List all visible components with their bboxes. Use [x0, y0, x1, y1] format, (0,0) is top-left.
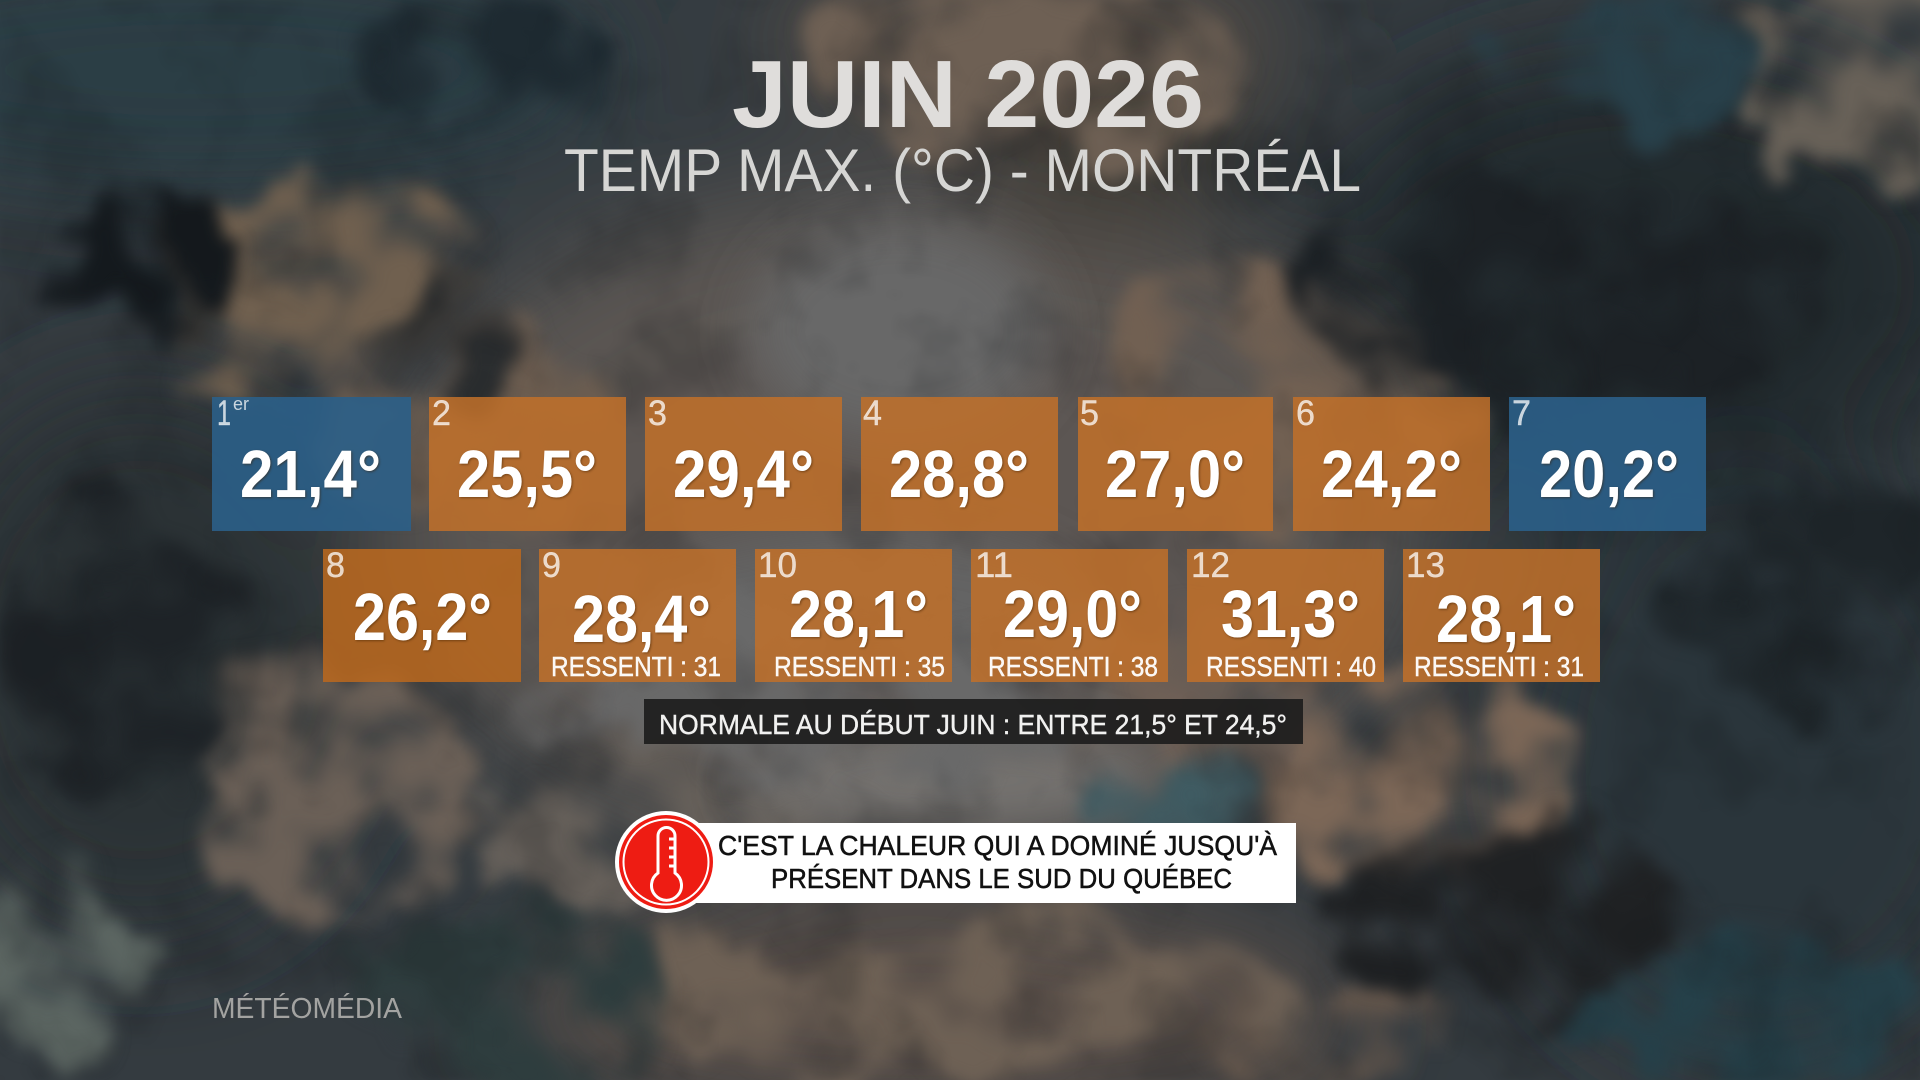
- tile: day 13: 28,1°: [1436, 582, 1576, 657]
- tile: day 12: [1187, 546, 1384, 682]
- subtitle: TEMP MAX. (°C) - MONTRÉAL: [564, 137, 1361, 204]
- tile: day 4: [861, 394, 1058, 531]
- callout banner: PRÉSENT DANS LE SUD DU QUÉBEC: [771, 863, 1232, 894]
- tile: day 13: 13: [1406, 546, 1445, 585]
- tile: day 4: 28,8°: [889, 437, 1029, 512]
- tile: day 5: 5: [1080, 394, 1099, 433]
- tile: day 4: 4: [863, 394, 882, 433]
- tile: day 7: 7: [1512, 394, 1531, 433]
- tile: day 1: [212, 394, 411, 531]
- tile: day 9: [539, 546, 736, 682]
- icon: thermometer badge: [615, 811, 717, 913]
- callout banner: [690, 823, 1296, 903]
- tile: day 11: RESSENTI : 38: [988, 651, 1158, 682]
- tile: day 12: 31,3°: [1221, 577, 1360, 652]
- tile: day 1: 1: [217, 394, 231, 433]
- tile: day 3: 3: [648, 394, 667, 433]
- tile: day 7: [1509, 394, 1706, 531]
- tile: day 11: 29,0°: [1003, 577, 1142, 652]
- tile: day 6: [1293, 394, 1490, 531]
- row 2 tiles: [323, 546, 1600, 682]
- central grey clearing: [640, 220, 1160, 830]
- tile: day 11: 11: [975, 546, 1013, 585]
- tile: day 10: RESSENTI : 35: [774, 651, 945, 682]
- tile: day 12: RESSENTI : 40: [1206, 651, 1376, 682]
- tile: day 5: 27,0°: [1105, 437, 1245, 512]
- tile: day 2: 2: [432, 394, 451, 433]
- row 1 tiles: [212, 394, 1706, 531]
- title: JUIN 2026: [732, 41, 1204, 148]
- tile: day 9: RESSENTI : 31: [551, 651, 721, 682]
- tile: day 10: [755, 546, 952, 682]
- tile: day 9: 28,4°: [572, 582, 711, 657]
- normal temperature bar: [644, 699, 1303, 744]
- tile: day 12: 12: [1191, 546, 1230, 585]
- tile: day 9: 9: [542, 546, 561, 585]
- tile: day 13: RESSENTI : 31: [1414, 651, 1584, 682]
- logo: MétéoMédia: MÉTÉOMÉDIA: [212, 992, 403, 1025]
- callout banner: C'EST LA CHALEUR QUI A DOMINÉ JUSQU'À: [718, 830, 1277, 861]
- tile: day 8: 8: [326, 546, 345, 585]
- tile: day 2: [429, 394, 626, 531]
- tile: day 8: 26,2°: [353, 580, 492, 655]
- normal temperature bar: NORMALE AU DÉBUT JUIN : ENTRE 21,5° ET 24,5°: [659, 709, 1287, 740]
- tile: day 6: 6: [1296, 394, 1315, 433]
- tile: day 3: 29,4°: [673, 437, 814, 512]
- tile: day 1: 21,4°: [240, 437, 381, 512]
- tile: day 8: [323, 546, 521, 682]
- tile: day 11: [971, 546, 1168, 682]
- tile: day 13: [1403, 546, 1600, 682]
- tile: day 6: 24,2°: [1321, 437, 1462, 512]
- tile: day 10: 28,1°: [789, 577, 928, 652]
- tile: day 5: [1078, 394, 1273, 531]
- tile: day 2: 25,5°: [457, 437, 597, 512]
- tile: day 1: er: [233, 394, 249, 414]
- tile: day 7: 20,2°: [1539, 437, 1679, 512]
- tile: day 10: 10: [758, 546, 797, 585]
- tile: day 3: [645, 394, 842, 531]
